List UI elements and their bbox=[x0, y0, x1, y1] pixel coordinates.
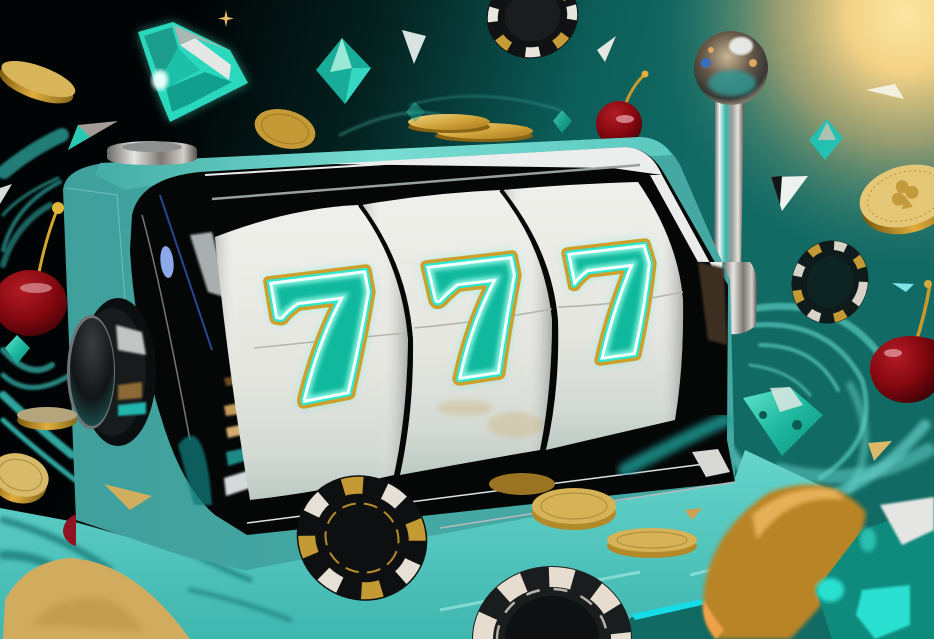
seven 3 bbox=[563, 240, 655, 364]
diamond: small top bbox=[316, 38, 371, 104]
swirls: right bbox=[340, 96, 895, 478]
poker chip: top bbox=[477, 0, 588, 69]
diamond: small left and top bbox=[5, 102, 572, 364]
swirl sweep: lower right bbox=[722, 385, 928, 500]
reel 2 bbox=[362, 190, 552, 475]
cherry: top bbox=[596, 70, 648, 147]
diamond: right small bbox=[809, 119, 843, 160]
base swirl streaks bbox=[3, 520, 290, 620]
left chrome knob bbox=[67, 298, 156, 446]
large foreground gold coin: right bbox=[703, 484, 866, 639]
cherry: right bbox=[870, 280, 934, 403]
swirls: left bbox=[3, 135, 75, 480]
large foreground gold coin: left bbox=[3, 558, 190, 639]
poker chip: foreground bottom bbox=[472, 566, 632, 639]
reel 3 bbox=[503, 182, 683, 450]
diamond: right mid bbox=[743, 387, 823, 456]
diamond: large top bbox=[138, 22, 248, 122]
coin stack on top of machine bbox=[408, 114, 533, 142]
sparkle bbox=[218, 10, 234, 27]
coin reflections on reels bbox=[437, 400, 543, 438]
swirl over frame corner bbox=[625, 420, 725, 470]
large foreground diamond: bottom right bbox=[816, 497, 934, 639]
button on top of machine bbox=[107, 141, 197, 165]
poker chip: foreground centre bbox=[276, 454, 448, 622]
gold coins bbox=[0, 54, 934, 558]
machine body bbox=[63, 137, 735, 570]
red ring by machine foot bbox=[63, 514, 76, 546]
triangular shards bbox=[0, 30, 914, 520]
reel dividers bbox=[360, 190, 555, 476]
reel 1 bbox=[215, 205, 408, 500]
seven 2 bbox=[422, 252, 520, 384]
poker chip: right bbox=[780, 230, 880, 334]
chrome reel frame bbox=[130, 147, 735, 535]
base platform bbox=[0, 450, 830, 639]
seven 1 bbox=[265, 266, 374, 407]
cherry: left bbox=[0, 202, 67, 336]
lever bbox=[694, 31, 768, 334]
